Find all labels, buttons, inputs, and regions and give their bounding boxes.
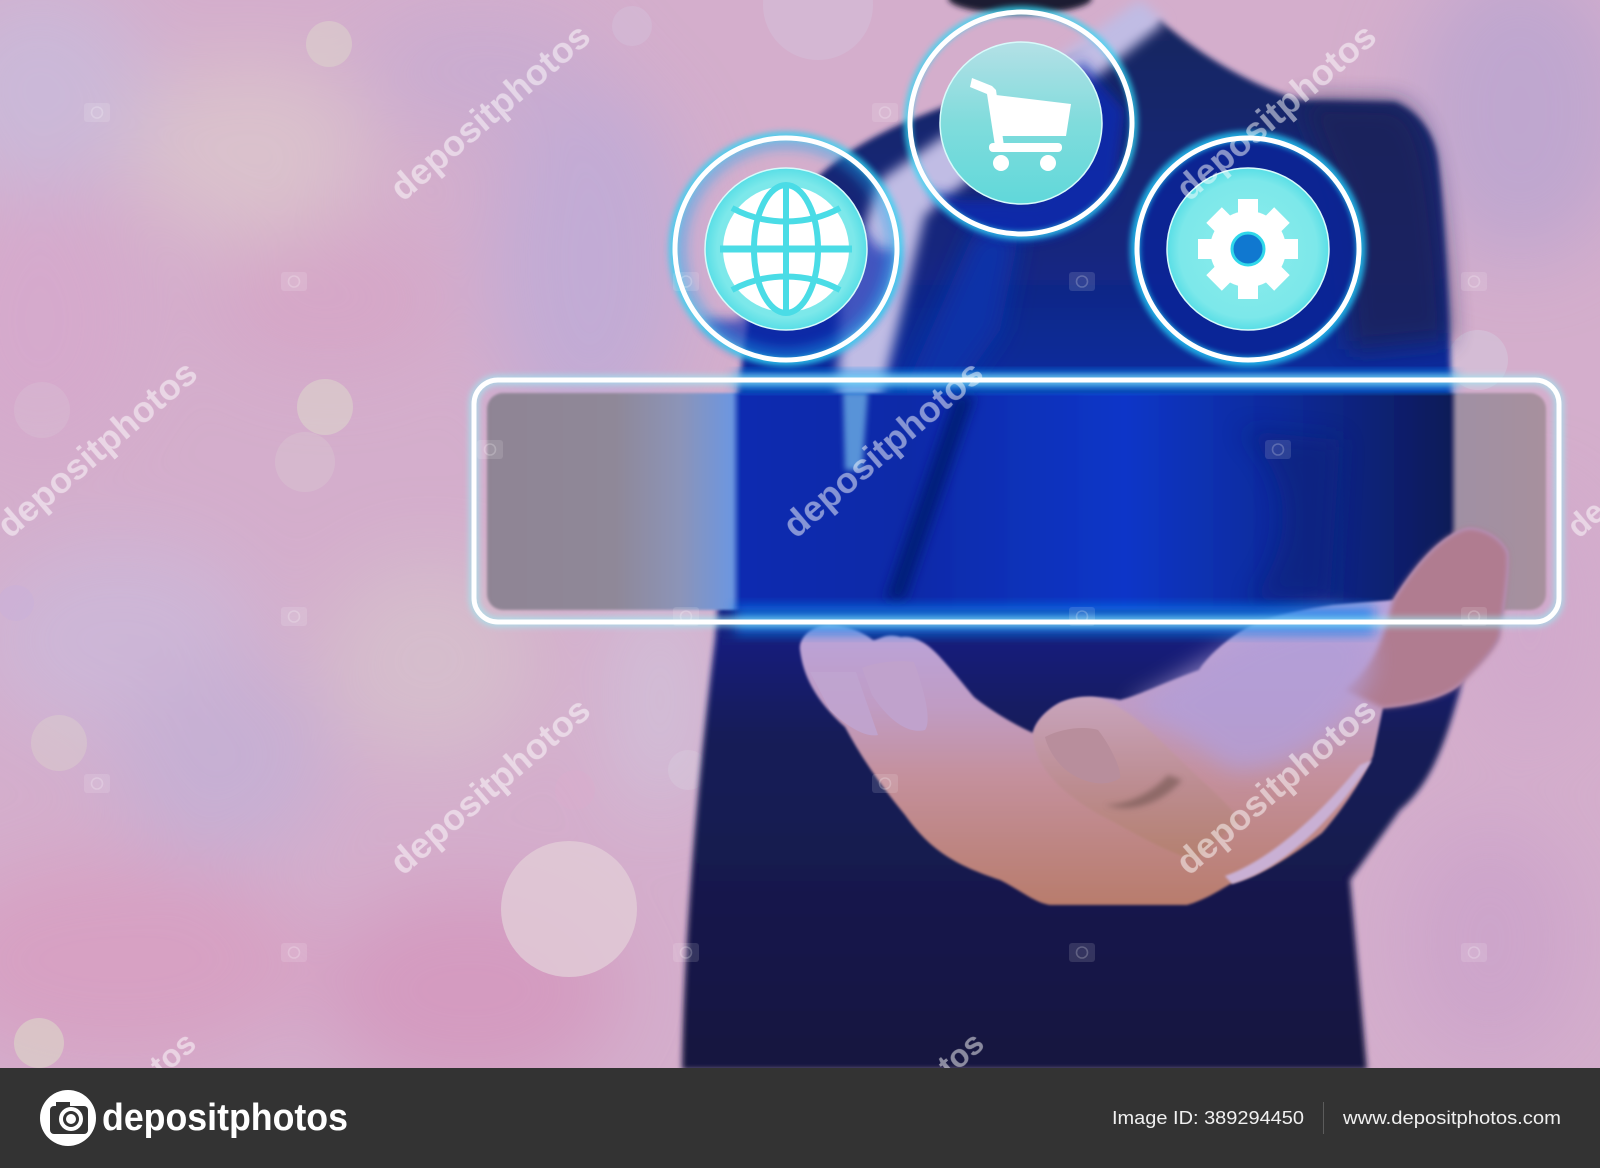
footer bar bbox=[0, 1068, 1600, 1168]
thumbnail bbox=[1045, 728, 1120, 783]
glass bar: translucent fill bbox=[487, 392, 1546, 610]
wrist highlight bbox=[1130, 612, 1372, 770]
website: www.depositphotos.com bbox=[1342, 1108, 1561, 1128]
suit jacket bbox=[682, 20, 1463, 1070]
head shadow at top bbox=[948, 0, 1092, 14]
watermarks: small camera marks bbox=[84, 103, 1487, 962]
knuckle shadow bbox=[1105, 775, 1182, 808]
icon: depositphotos camera logo bbox=[40, 1090, 96, 1146]
watermarks: depositphotos logotype: depositphotos bbox=[1167, 689, 1384, 883]
shirt cuff bbox=[1225, 760, 1372, 884]
watermarks: depositphotos logotype: tos bbox=[143, 1024, 203, 1083]
outer fingers, reddish bbox=[1345, 528, 1508, 708]
watermarks: depositphotos logotype: tos bbox=[931, 1024, 991, 1083]
footer logotype: depositphotos bbox=[102, 1097, 348, 1139]
index fingernail bbox=[862, 661, 928, 731]
icon: shopping cart button bbox=[908, 10, 1134, 240]
icon: gear button bbox=[1135, 136, 1361, 362]
shirt seen through the bar bbox=[843, 392, 868, 470]
sleeve folds in bar bbox=[1240, 430, 1340, 600]
icon: globe button bbox=[673, 136, 899, 362]
footer divider bbox=[1323, 1102, 1324, 1134]
watermarks: depositphotos logotype: depositphotos bbox=[381, 15, 598, 209]
watermarks: depositphotos logotype: depositphotos bbox=[1167, 15, 1384, 209]
hand bbox=[800, 528, 1508, 905]
suit upper right shadow bbox=[1300, 100, 1450, 350]
watermarks: depositphotos logotype: depositphotos bbox=[381, 689, 598, 883]
image id: Image ID: 389294450 bbox=[1112, 1108, 1304, 1128]
middle fingernail bbox=[810, 672, 878, 735]
watermarks: depositphotos logotype: depositphotos bbox=[774, 352, 991, 546]
glass bar: glowing frame bbox=[474, 372, 1559, 634]
hand silhouette bbox=[800, 528, 1508, 905]
thumb bbox=[1033, 697, 1240, 860]
shirt collar and tie bbox=[838, 0, 1165, 400]
lapel shadow in bar bbox=[885, 395, 975, 600]
